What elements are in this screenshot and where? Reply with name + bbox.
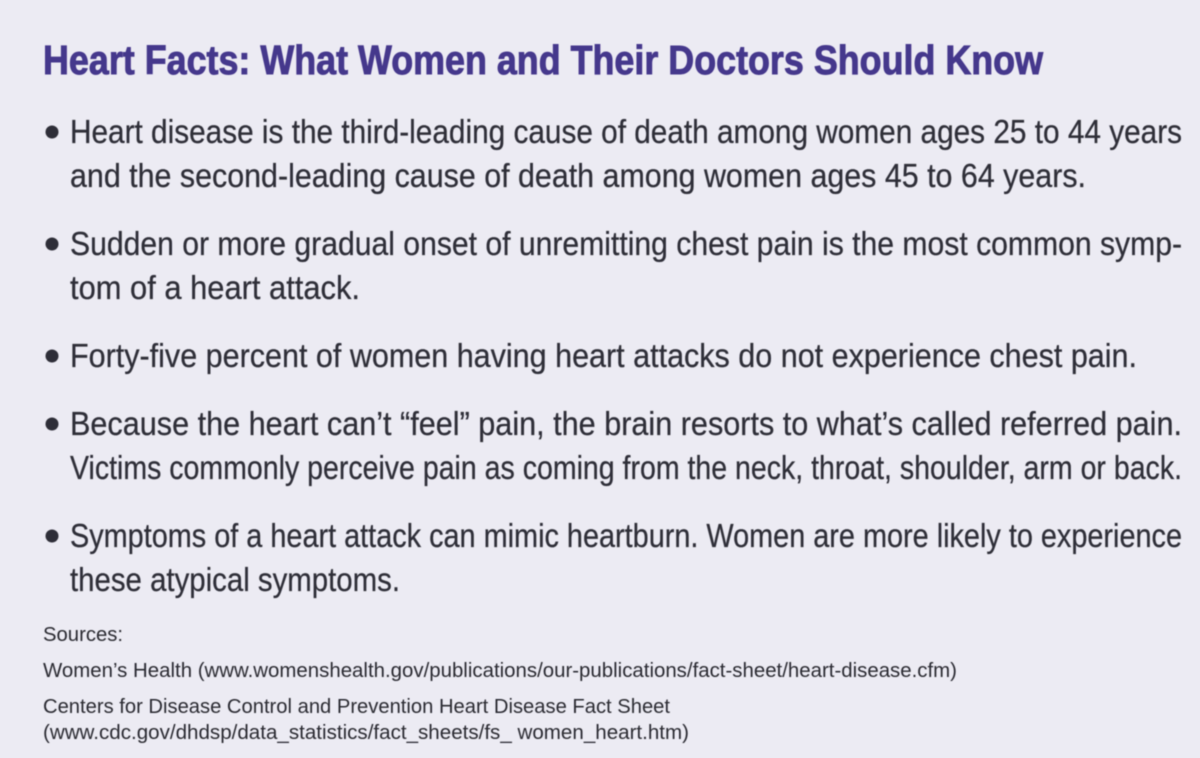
sources (43, 623, 957, 744)
sources: (www.cdc.gov/dhdsp/data_statistics/fact_sheets/fs_ women_heart.htm) (43, 721, 689, 744)
sources: Women’s Health (www.womenshealth.gov/publications/our-publications/fact-sheet/heart-disease.cfm) (43, 659, 957, 682)
title: Heart Facts: What Women and Their Doctors Should Know (43, 37, 1043, 83)
bullet 1: and the second-leading cause of death among women ages 45 to 64 years. (70, 158, 1086, 195)
bullet 4 (46, 406, 1182, 487)
bullet 1 (46, 114, 1182, 195)
sources: Sources: (43, 623, 123, 646)
bullet list of heart facts (46, 114, 1182, 599)
sources: Centers for Disease Control and Prevention Heart Disease Fact Sheet (43, 695, 670, 718)
bullet 5: these atypical symptoms. (70, 562, 400, 599)
bullet 2 (46, 226, 1182, 307)
bullet 2: tom of a heart attack. (70, 270, 360, 307)
bullet 5 (46, 518, 1182, 599)
